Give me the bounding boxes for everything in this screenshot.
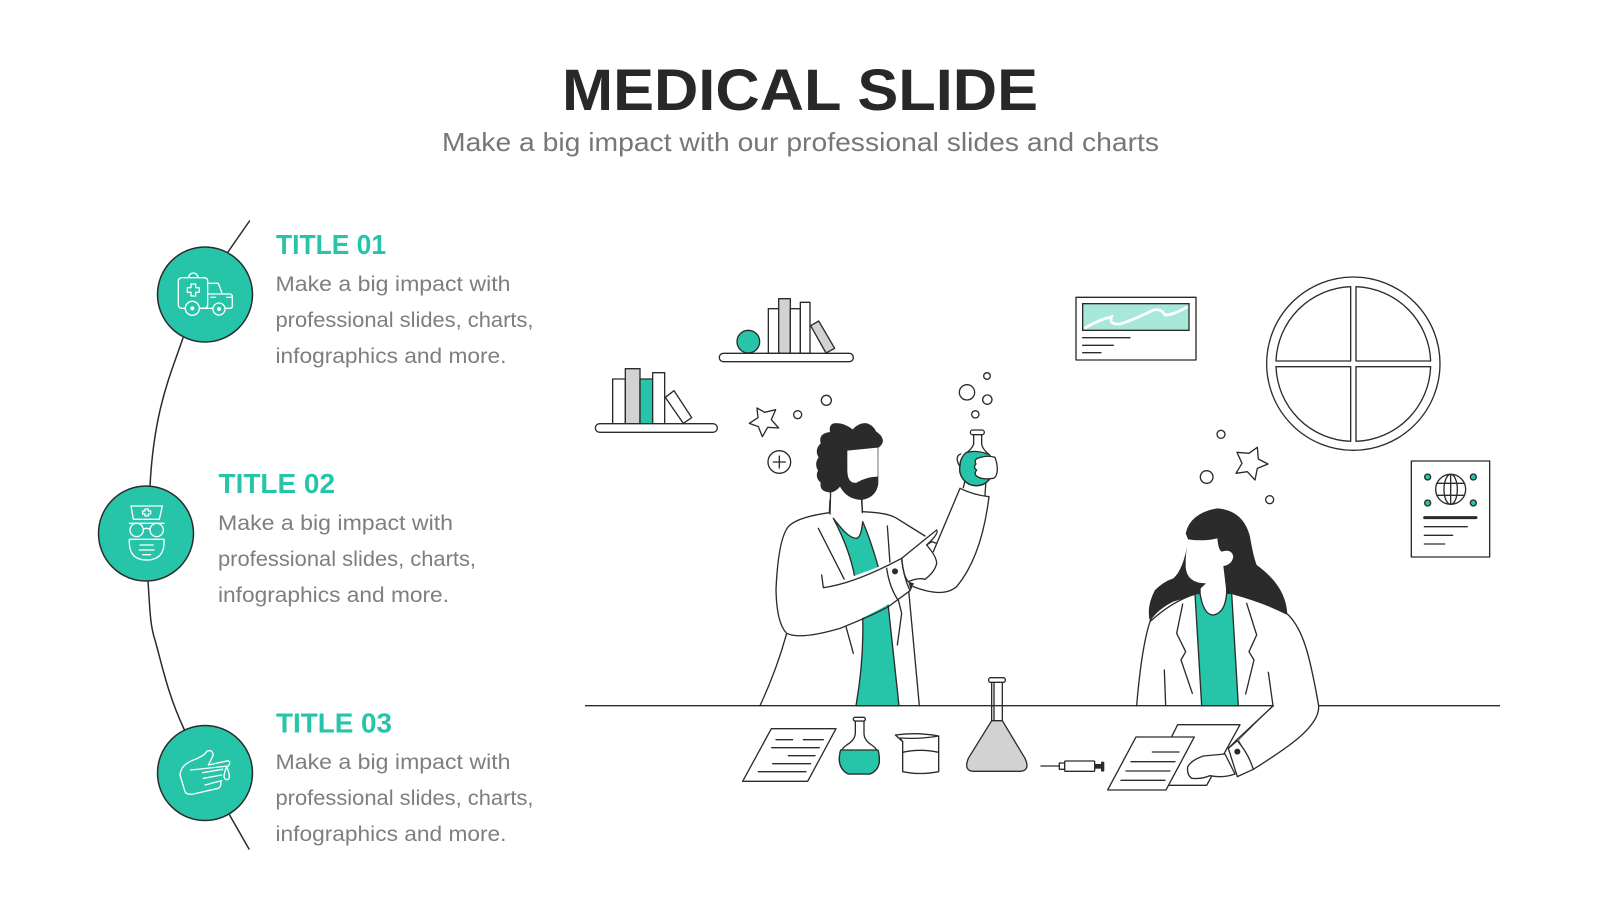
text block: item 02: infographics and more.: [218, 583, 449, 607]
icon: ambulance circle: [158, 247, 252, 342]
panel: shelves, man head and flask: [595, 299, 997, 514]
raised flask and hand: [957, 430, 997, 495]
shelf with books left: [595, 369, 717, 432]
text block: item 03: infographics and more.: [276, 822, 506, 846]
text block: item 03: professional slides, charts,: [276, 786, 534, 810]
shirt: [1195, 593, 1238, 706]
text block: item 03: [276, 750, 534, 846]
framed chart: [1076, 297, 1196, 360]
subtitle: Make a big impact with our professional slides and charts: [442, 127, 1159, 157]
paper on table: [743, 729, 836, 781]
panel: wall items: [1076, 277, 1490, 557]
round flask: [839, 717, 879, 774]
star and bubbles right: [1200, 430, 1274, 504]
face: [1186, 538, 1233, 597]
text block: item 02: Make a big impact with: [218, 511, 453, 535]
text block: item 03: Make a big impact with: [276, 750, 510, 774]
text block: item 02: [218, 511, 476, 607]
globe poster: [1411, 461, 1490, 557]
syringe: [1041, 761, 1104, 772]
text block: item 01: professional slides, charts,: [276, 308, 534, 332]
bubbles above flask: [959, 373, 992, 418]
icon: hand circle: [158, 726, 252, 820]
erlenmeyer flask: [967, 678, 1027, 771]
man head: [816, 423, 883, 514]
panel: item 02: [98, 468, 476, 607]
table line: [585, 705, 1500, 707]
text block: item 01: [276, 272, 534, 368]
panel: woman: [1041, 508, 1319, 790]
hair: [1149, 508, 1287, 622]
papers: [1108, 725, 1240, 790]
shelf with books and ball: [719, 299, 853, 362]
panel: item 03: [158, 708, 534, 846]
text block: item 01: Make a big impact with: [276, 272, 510, 296]
teal shirt: [833, 518, 899, 706]
heading: title 01: TITLE 01: [276, 229, 386, 260]
timeline curve: [148, 221, 250, 849]
heading: title 02: TITLE 02: [218, 468, 335, 499]
heading: title 03: TITLE 03: [276, 708, 392, 738]
icon: nurse circle: [98, 486, 194, 581]
beaker: [895, 734, 939, 773]
arm and hand: [1187, 613, 1319, 779]
title: MEDICAL SLIDE: [562, 58, 1038, 123]
text block: item 02: professional slides, charts,: [218, 547, 476, 571]
coat lines: [1137, 593, 1287, 706]
panel: man body: [743, 488, 1027, 781]
lab coat: [760, 488, 989, 706]
pointing arm: [780, 530, 937, 636]
text block: item 01: infographics and more.: [276, 344, 506, 368]
icon: star and bubbles left: [749, 395, 831, 473]
round window: [1267, 277, 1440, 450]
panel: item 01: [158, 229, 534, 368]
